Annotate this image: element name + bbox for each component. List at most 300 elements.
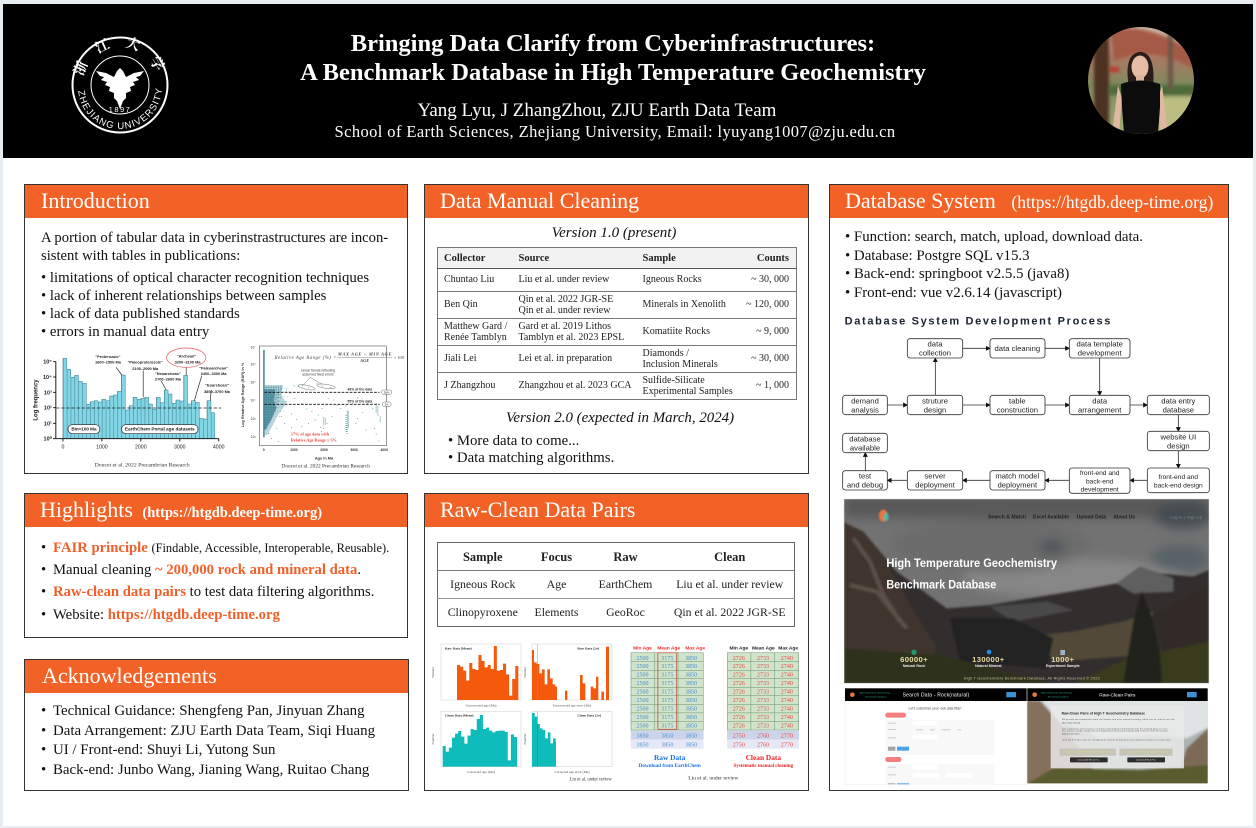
scatter: relative age range vs age: 0 — [263, 448, 265, 452]
table: clean data: 2733 — [757, 690, 769, 696]
table: clean data: 2733 — [757, 681, 769, 687]
collector table: Matthew Gard / — [444, 320, 507, 332]
title: Bringing Data Clarify from Cyberinfrastructures: — [351, 30, 875, 57]
version 2.0 label: Version 2.0 (expected in March, 2024) — [506, 410, 734, 426]
collector table: Renée Tamblyn — [444, 332, 507, 343]
table: clean data: 2740 — [781, 673, 793, 679]
flowchart labels: arrangement — [1078, 405, 1122, 414]
table: clean data: 2726 — [733, 723, 745, 729]
navigation labels: Search & Match — [988, 515, 1026, 521]
scatter: relative age range vs age: 10⁵ — [250, 380, 256, 384]
flowchart labels: construction — [997, 405, 1038, 414]
flowchart labels: database — [1163, 405, 1194, 414]
table: raw data: 3850 — [685, 706, 697, 712]
collector table: ~ 9, 000 — [756, 326, 789, 337]
screenshot: raw-clean pairs page: Raw-Clean Pairs of High T Geochemistry Database — [1062, 711, 1145, 715]
table: clean data: Max Age — [778, 645, 798, 651]
histogram: log frequency vs age: 3400–3300 Ma — [201, 372, 227, 376]
acknowledgements list — [41, 703, 375, 778]
version 2.0 bullets — [448, 433, 614, 466]
table: raw data: 3850 — [685, 673, 697, 679]
pairs table — [437, 542, 795, 627]
highlight: raw-clean pairs: Raw-clean data pairs to test data filtering algorithms. — [53, 584, 374, 600]
intro paragraph: sistent with tables in publications: — [41, 248, 240, 264]
screenshot: raw-clean pairs page — [1025, 688, 1210, 785]
database system bullets — [845, 229, 1143, 301]
intro bullet list: • errors in manual data entry — [41, 324, 209, 340]
histogram: log frequency vs age: 3000 — [174, 444, 186, 450]
table: raw data: Raw Data — [654, 753, 686, 762]
flowchart labels: development — [1078, 349, 1122, 358]
screenshot: search data page: Benchmark Database — [865, 696, 887, 699]
acknowledgements list: • — [41, 723, 46, 739]
table: clean data: Clean Data — [746, 753, 781, 762]
highlight: manual cleaning: • — [41, 562, 46, 578]
collector table: Collector — [444, 252, 485, 264]
table: raw data: 2500 — [636, 723, 648, 729]
table: clean data: 2726 — [733, 681, 745, 687]
collector table: J Zhangzhou — [444, 380, 495, 391]
heading: database system: Database System (https://htgdb.deep-time.org) — [845, 188, 1213, 213]
heading: raw-clean data pairs — [425, 494, 808, 527]
table: raw data: 2500 — [636, 706, 648, 712]
flowchart labels: database — [849, 434, 881, 443]
collector table — [437, 247, 797, 400]
intro paragraph — [41, 230, 388, 264]
flowchart: database system development process — [842, 315, 1210, 494]
pairs table: Liu et al. under review — [676, 577, 783, 591]
histogram: log frequency vs age: "Eoarchean" — [205, 383, 229, 387]
hero title: Benchmark Database — [886, 577, 997, 591]
pairs table: EarthChem — [599, 577, 652, 591]
flowchart labels: development — [1081, 486, 1119, 493]
histogram: clean 2 sigma: Clean Data (2σ) — [577, 713, 602, 717]
intro bullet list: • lack of data published standards — [41, 306, 240, 322]
collector table: Qin et al. under review — [518, 305, 610, 316]
histogram: clean mean: Number — [431, 733, 435, 744]
histogram: log frequency vs age: 1000 — [96, 444, 108, 450]
histogram: log frequency vs age: 10⁴ — [43, 375, 52, 381]
scatter: relative age range vs age: MAX AGE − MIN AGE — [337, 351, 392, 356]
statistics: Natural Mineral — [975, 664, 1002, 668]
intro paragraph: A portion of tabular data in cyberinstrastructures are incon- — [41, 230, 388, 246]
table: clean data: 2740 — [781, 723, 793, 729]
table: clean data: 2726 — [733, 715, 745, 721]
table: clean data: 2733 — [757, 715, 769, 721]
flowchart labels: data entry — [1161, 396, 1196, 405]
scatter: relative age range vs age — [241, 346, 405, 469]
histogram: clean mean — [431, 711, 521, 774]
title — [300, 30, 926, 86]
collector table: Komatiite Rocks — [642, 326, 710, 337]
pairs table: Sample — [463, 550, 503, 564]
table: clean data: 2726 — [733, 690, 745, 696]
table: raw data: 3850 — [685, 715, 697, 721]
collector table: ~ 30, 000 — [751, 353, 789, 364]
table: clean data: 2726 — [733, 664, 745, 670]
table: clean data: 2760 — [757, 733, 769, 739]
logo: Zhejiang University seal: 1897 — [109, 105, 131, 114]
table: clean data: 2750 — [733, 742, 745, 748]
histogram: log frequency vs age: 10² — [44, 406, 52, 412]
collector table: Ben Qin — [444, 299, 478, 310]
acknowledgements list: Back-end: Junbo Wang, Jianing Wang, Ruitao Chang — [53, 762, 369, 778]
flowchart labels: match model — [995, 472, 1040, 481]
panel: raw-clean data pairs — [424, 493, 809, 791]
table: raw data: 3175 — [661, 690, 673, 696]
table: clean data: 2733 — [757, 664, 769, 670]
pairs table: Elements — [535, 605, 578, 619]
scatter: relative age range vs age: 10⁶ — [250, 362, 256, 366]
flowchart labels: server — [924, 472, 946, 481]
screenshot: raw-clean pairs page: Download All Mineral Pairs — [1078, 759, 1100, 762]
table: raw data: 3175 — [661, 706, 673, 712]
table: clean data: 2740 — [781, 715, 793, 721]
logo flame — [879, 510, 889, 522]
scatter: relative age range vs age: × 100 — [394, 355, 405, 360]
statistics: 60000+ — [900, 655, 928, 664]
highlight: manual cleaning: Manual cleaning ~ 200,000 rock and mineral data. — [53, 562, 361, 578]
histogram: log frequency vs age: 10³ — [44, 390, 52, 396]
navigation labels: Excel Available — [1033, 515, 1069, 521]
scatter: relative age range vs age: 10⁷ — [251, 346, 256, 350]
collector table: ~ 120, 000 — [746, 299, 789, 310]
heading: acknowledgements — [25, 660, 408, 693]
version 2.0 bullets: • More data to come... — [448, 433, 579, 449]
collector table: Minerals in Xenolith — [642, 299, 726, 310]
collector table: Diamonds / — [642, 348, 689, 358]
histogram: log frequency vs age: Bin=100 Ma — [71, 427, 97, 432]
version 1.0 label: Version 1.0 (present) — [552, 225, 676, 241]
histogram: log frequency vs age: 2700–2600 Ma — [155, 377, 182, 381]
table: clean data: 2726 — [733, 698, 745, 704]
hero title: High Temperature Geochemistry — [886, 556, 1057, 570]
table: clean data: Systematic manual cleaning — [734, 764, 794, 769]
charts: age histogram and relative age range scatter — [33, 346, 405, 469]
screenshot: raw-clean pairs page: Benchmark Database — [1048, 696, 1069, 699]
collector table: ~ 1, 000 — [756, 380, 789, 391]
scatter: relative age range vs age: 10³ — [251, 417, 257, 421]
histogram: log frequency vs age: 2000 — [135, 444, 147, 450]
screenshot: raw-clean pairs page: We provide two comparative data sets before and after manual cleaning, which can be used to test the — [1062, 718, 1174, 721]
histogram: log frequency vs age: 3800–3700 Ma — [204, 390, 231, 394]
scatter: relative age range vs age: Age in Ma — [315, 456, 334, 460]
table: clean data: 2750 — [733, 733, 745, 739]
scatter: relative age range vs age: 5% — [385, 402, 389, 406]
flowchart boxes — [843, 339, 1209, 493]
pairs table: Igneous Rock — [450, 577, 515, 591]
histogram: clean 2 sigma: Corrected age error (Ma) — [554, 770, 590, 774]
table: clean data: 2733 — [757, 656, 769, 662]
authors: Yang Lyu, J ZhangZhou, ZJU Earth Data Team — [418, 100, 776, 121]
table: raw data: 3850 — [636, 733, 648, 739]
header banner — [3, 4, 1253, 158]
flowchart labels: data cleaning — [995, 344, 1040, 353]
table: raw data: 3850 — [685, 681, 697, 687]
comparison tables: raw vs clean data — [630, 645, 799, 782]
flowchart labels: front-end and — [1159, 474, 1198, 481]
collector table: Igneous Rocks — [642, 274, 702, 285]
table: raw data: 3175 — [661, 664, 673, 670]
table: raw data: 3175 — [661, 723, 673, 729]
flowchart labels: design — [1167, 441, 1190, 450]
scatter: relative age range vs age: Linear trends reflecting — [301, 368, 335, 372]
screenshot: raw-clean pairs page: Raw-clean Pairs for EarthChem Igneous rocks — [1064, 750, 1114, 753]
table: clean data: 2733 — [757, 698, 769, 704]
table: raw data: Min Age — [633, 645, 652, 651]
table: raw data: 3850 — [685, 664, 697, 670]
table: raw data: 2500 — [636, 698, 648, 704]
scatter: relative age range vs age: 1000 — [290, 448, 298, 452]
collector table: Counts — [757, 252, 789, 264]
scatter: relative age range vs age: Log Relative Age Range (RAR) in % — [241, 362, 245, 427]
histogram: clean 2 sigma — [523, 711, 612, 774]
collector table: Gard et al. 2019 Lithos — [518, 320, 611, 332]
screenshot: raw-clean pairs page: Download All Rock Pairs — [1136, 759, 1156, 762]
portrait photo — [1088, 27, 1194, 134]
heading: highlights — [25, 494, 407, 527]
table: raw data — [631, 645, 705, 769]
scatter: relative age range vs age: 58% — [384, 390, 390, 394]
screenshot: raw-clean pairs page: Raw-Clean Pairs — [1099, 692, 1136, 698]
heading: introduction — [25, 185, 407, 218]
histogram: clean 2 sigma: Number — [523, 733, 527, 744]
histograms: raw and clean data — [431, 644, 612, 783]
scatter: relative age range vs age: 10⁴ — [250, 399, 256, 403]
collector table: Qin et al. 2022 JGR-SE — [518, 294, 613, 304]
table: raw data: 3175 — [661, 656, 673, 662]
acknowledgements list: • — [41, 742, 46, 758]
flowchart labels: data — [928, 340, 943, 349]
scatter: relative age range vs age: 48% of the data — [347, 387, 372, 391]
table: clean data: 2740 — [781, 706, 793, 712]
flowchart labels: and debug — [847, 481, 883, 490]
database system bullets: • Database: Postgre SQL v15.3 — [845, 248, 1030, 264]
panel: introduction — [24, 184, 408, 474]
pairs table: Focus — [541, 550, 572, 564]
panel: data manual cleaning — [424, 184, 809, 474]
collector table: Liu et al. under review — [518, 274, 609, 285]
histogram: log frequency vs age: Log frequency — [33, 379, 40, 421]
table: clean data: 2740 — [781, 664, 793, 670]
table: raw data: 2500 — [636, 690, 648, 696]
collector table: Jiali Lei — [444, 353, 476, 364]
navigation labels: Log in | Sign up — [1170, 515, 1203, 520]
panel: highlights — [24, 493, 408, 638]
screenshot: raw-clean pairs page: Raw-clean Pairs for Clinopyroxene Data — [1126, 750, 1168, 753]
table: clean data: Min Age — [729, 645, 748, 651]
screenshot: raw-clean pairs page: High Temperature Geochemistry — [1041, 692, 1073, 695]
table: clean data: 2733 — [757, 673, 769, 679]
flowchart labels: test — [859, 472, 872, 481]
histogram: log frequency vs age: 2100–2000 Ma — [132, 367, 159, 371]
scatter: relative age range vs age: 10² — [251, 435, 257, 439]
histogram: raw 2 sigma: Number — [523, 666, 527, 678]
histogram: raw 2 sigma: Uncorrected age error (Ma) — [553, 704, 592, 708]
scatter: relative age range vs age: Relative Age Range ≤ 5% — [291, 437, 337, 442]
flowchart labels: collection — [919, 349, 951, 358]
table: clean data: 2740 — [781, 690, 793, 696]
statistics: Experiment Sample — [1046, 664, 1080, 668]
table: raw data: 3850 — [636, 742, 648, 748]
screenshot: raw-clean pairs page: dataset of Qin's team. — [1062, 732, 1080, 735]
highlight: raw-clean pairs: • — [41, 584, 46, 600]
screenshot: raw-clean pairs page: the cleaned, another comparison of clinopyroxene mineral data downloaded in Georoc with the cleaned — [1062, 730, 1167, 733]
histogram: log frequency vs age: "Paleoarchean" — [199, 367, 228, 371]
flowchart labels: demand — [851, 396, 879, 405]
panel: acknowledgements — [24, 659, 409, 791]
version 2.0 bullets: • Data matching algorithms. — [448, 450, 614, 466]
histogram: clean mean: Clean Data (Mean) — [445, 713, 474, 717]
table: raw data: 3850 — [661, 733, 673, 739]
table: raw data: 3850 — [685, 723, 697, 729]
histogram: log frequency vs age: "Neoarchean" — [155, 372, 181, 376]
affiliation: School of Earth Sciences, Zhejiang University, Email: lyuyang1007@zju.edu.cn — [335, 122, 895, 141]
histogram: log frequency vs age: 0 — [61, 444, 64, 450]
intro bullet list — [41, 270, 369, 340]
flowchart labels: struture — [922, 396, 948, 405]
heading: highlights: Highlights (https://htgdb.deep-time.org) — [40, 497, 322, 522]
hero title — [886, 556, 1057, 591]
title: A Benchmark Database in High Temperature Geochemistry — [300, 59, 926, 86]
table: clean data: 2733 — [757, 723, 769, 729]
heading: acknowledgements: Acknowledgements — [42, 663, 217, 688]
pairs table: Clean — [714, 550, 745, 564]
histogram: log frequency vs age: "Paleoproterozoic" — [128, 361, 163, 365]
collector table: Tamblyn et al. 2023 EPSL — [518, 332, 624, 343]
pairs table: Clinopyroxene — [448, 605, 518, 619]
flowchart labels — [847, 340, 1203, 493]
acknowledgements list: Technical Guidance: Shengfeng Pan, Jinyuan Zhang — [53, 703, 365, 719]
table: raw data: 3850 — [685, 733, 697, 739]
histogram: log frequency vs age: 10⁵ — [43, 360, 52, 366]
table: raw data: 2500 — [636, 715, 648, 721]
statistics: 130000+ — [972, 655, 1005, 664]
flowchart labels: data template — [1076, 340, 1123, 349]
statistics: High T Geochemistry Benchmark Database, All Rights Reserved © 2023 — [964, 677, 1100, 681]
table: clean data: 2726 — [733, 656, 745, 662]
histogram: raw 2 sigma — [523, 644, 612, 708]
table: raw data: Mean Age — [657, 645, 680, 651]
flowchart labels: website UI — [1159, 432, 1196, 441]
heading: data manual cleaning — [425, 185, 808, 218]
histogram: log frequency vs age: 3200–3100 Ma — [175, 361, 201, 365]
screenshot: raw-clean pairs page: One comparison of the igneous rock data downloaded in EarthChem with the cleaned dataset of Liu — [1062, 727, 1167, 730]
table: clean data: 2726 — [733, 673, 745, 679]
table: raw data: Max Age — [685, 645, 705, 651]
histogram: log frequency vs age: 10¹ — [44, 421, 52, 427]
collector table: Sulfide-Silicate — [642, 374, 705, 386]
table: raw data: 2500 — [636, 681, 648, 687]
histogram: log frequency vs age: Doucet et al. 2022 Precambrian Research — [95, 462, 190, 468]
histogram: log frequency vs age: "Proterozoic" — [95, 355, 121, 359]
citation: Liu et al. under review — [570, 778, 612, 783]
screenshot: search data page: Search Data - Rock(natural) — [903, 692, 970, 698]
intro bullet list: • limitations of optical character recognition techniques — [41, 270, 369, 286]
screenshot: search data page — [845, 688, 1027, 784]
scatter: relative age range vs age: 17% of age data with — [291, 432, 330, 437]
histogram: raw mean: Uncorrected age (Ma) — [466, 704, 497, 708]
collector table: ~ 30, 000 — [751, 274, 789, 285]
table: clean data: Mean Age — [752, 645, 775, 651]
highlight: FAIR principle: FAIR principle (Findable, Accessible, Interoperable, Reusable). — [53, 540, 389, 556]
table: clean data: 2760 — [757, 742, 769, 748]
table: raw data: 3850 — [685, 698, 697, 704]
histogram: log frequency vs age: 10⁰ — [44, 437, 52, 443]
histogram: log frequency vs age: 1600–1500 Ma — [95, 361, 122, 365]
collector table: Source — [518, 252, 549, 264]
navigation labels — [988, 515, 1203, 521]
flowchart labels: analysis — [851, 405, 879, 414]
scatter: relative age range vs age: 2000 — [320, 448, 328, 452]
histogram: raw mean — [431, 644, 521, 708]
flowchart labels: front-end and — [1080, 470, 1120, 477]
table: raw data: 3175 — [661, 715, 673, 721]
table: raw data: 3850 — [685, 742, 697, 748]
table: clean data: 2726 — [733, 706, 745, 712]
database system bullets: • Front-end: vue v2.6.14 (javascript) — [845, 285, 1062, 301]
flowchart labels: data — [1092, 396, 1108, 405]
statistics: Natural Rock — [903, 664, 926, 668]
acknowledgements list: UI / Front-end: Shuyi Li, Yutong Sun — [53, 742, 275, 758]
screenshots: search and raw-clean pages — [844, 688, 1208, 784]
flowchart heading: Database System Development Process — [845, 315, 1112, 327]
scatter: relative age range vs age: 55% of the data — [347, 399, 372, 403]
histogram: log frequency vs age: 4000 — [213, 444, 225, 450]
histogram: log frequency vs age — [33, 348, 231, 468]
acknowledgements list: • — [41, 762, 46, 778]
acknowledgements list: Data Arrangement: ZJU Earth Data Team, Siqi Huang — [53, 723, 375, 739]
highlight: website: Website: https://htgdb.deep-time.org — [53, 607, 280, 623]
pairs table: GeoRoc — [606, 605, 645, 619]
scatter: relative age range vs age: 3000 — [350, 448, 358, 452]
table: raw data: 3175 — [661, 698, 673, 704]
flowchart labels: back-end — [1086, 478, 1114, 485]
scatter: relative age range vs age: assumed fixed errors — [302, 372, 334, 376]
table: clean data: 2733 — [757, 706, 769, 712]
histogram: log frequency vs age: EarthChem Portal age datasets — [125, 427, 195, 432]
table: raw data: 2500 — [636, 664, 648, 670]
table: raw data: 3175 — [661, 681, 673, 687]
flowchart arrows — [865, 348, 1178, 480]
table: clean data: 2770 — [781, 733, 793, 739]
flowchart labels: table — [1009, 396, 1026, 405]
logo: Zhejiang University seal: ZHEJIANG UNIVERSITY — [78, 88, 162, 129]
acknowledgements list: • — [41, 703, 46, 719]
collector table: Zhangzhou et al. 2023 GCA — [518, 380, 632, 391]
table: clean data: 2740 — [781, 698, 793, 704]
histogram: log frequency vs age: "Archean" — [177, 354, 196, 358]
scatter: relative age range vs age: Doucet et al. 2022 Precambrian Research — [282, 463, 370, 469]
statistics: 1000+ — [1051, 655, 1074, 664]
table: raw data: 2500 — [636, 656, 648, 662]
histogram: clean mean: Corrected age (Ma) — [467, 770, 496, 774]
statistics — [900, 650, 1100, 681]
flowchart labels: deployment — [915, 481, 956, 490]
table: clean data: 2770 — [781, 742, 793, 748]
table: clean data: 2740 — [781, 656, 793, 662]
screenshot: raw-clean pairs page: Click the File here links for clinopyroxene mineral and igneous rock comparison datasets respectively. — [1062, 738, 1171, 741]
screenshot: website home page — [844, 498, 1210, 684]
database system bullets: • Back-end: springboot v2.5.5 (java8) — [845, 266, 1069, 282]
histogram: raw 2 sigma: Raw Data (2σ) — [577, 646, 600, 650]
histogram: raw mean: Raw Data (Mean) — [445, 646, 472, 650]
scatter: relative age range vs age: 4000 — [381, 448, 388, 452]
scatter: relative age range vs age: Relative Age Range (%) = — [274, 356, 336, 361]
highlight: FAIR principle: • — [41, 540, 46, 556]
panel: database system — [829, 184, 1229, 791]
database system bullets: • Function: search, match, upload, download data. — [845, 229, 1143, 245]
